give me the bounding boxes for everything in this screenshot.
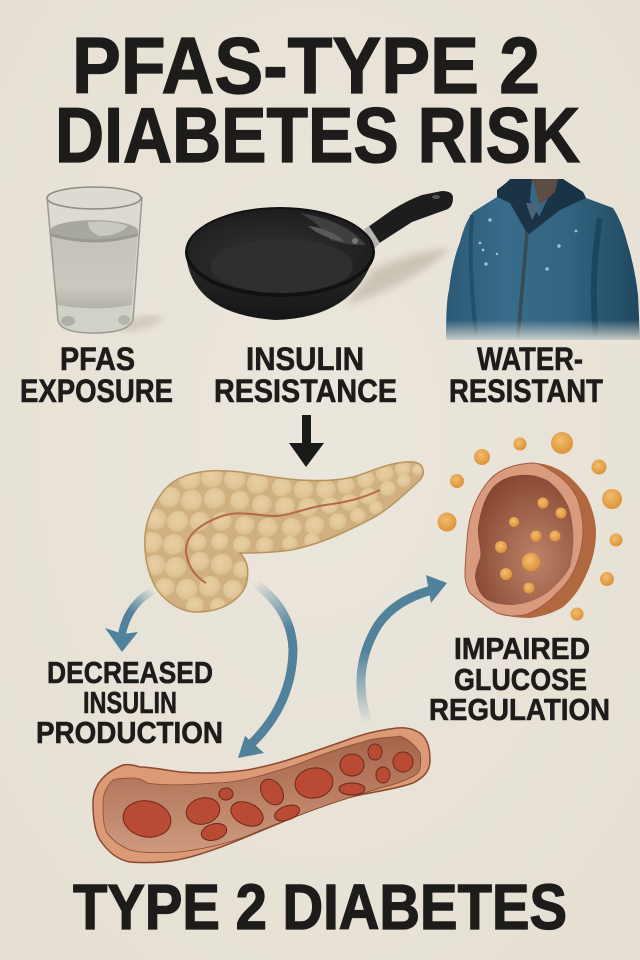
label: PFAS exposure [20,341,173,409]
icon: blood vessel [93,728,430,863]
label: decreased insulin production [36,655,223,750]
arrow: pancreas to decreased insulin [105,590,154,652]
label: impaired glucose regulation [429,631,610,727]
label: decreased insulin production: DECREASED [47,655,213,690]
label: PFAS exposure: PFAS [60,341,135,377]
icon: cell with glucose [438,432,622,620]
icon: pancreas [141,461,424,615]
title: PFAS-TYPE 2 [72,21,540,110]
label: impaired glucose regulation: GLUCOSE [454,662,587,697]
label: decreased insulin production: INSULIN [83,685,177,720]
label: impaired glucose regulation: IMPAIRED [454,631,590,666]
title: DIABETES RISK [55,91,580,179]
label: PFAS exposure: EXPOSURE [20,373,173,409]
label: decreased insulin production: PRODUCTION [36,715,223,750]
label: water-resistant: WATER- [477,341,583,377]
label: insulin resistance [214,341,397,409]
label: insulin resistance: RESISTANCE [214,373,397,409]
red blood cells [120,744,413,843]
label: water-resistant [449,341,603,409]
label: water-resistant: RESISTANT [449,373,603,409]
arrow: down to pancreas [289,415,324,467]
label: impaired glucose regulation: REGULATION [429,692,610,727]
icon: water-resistant jacket [444,179,640,344]
title [55,21,580,179]
water droplets [479,218,577,271]
icon: frying pan [185,191,453,320]
arrow: pancreas to blood vessel [238,583,293,758]
footer title: TYPE 2 DIABETES [73,871,567,943]
glucose particles [438,432,622,620]
label: insulin resistance: INSULIN [246,341,364,377]
arrow: blood vessel to impaired glucose [361,575,447,724]
icon: glass of water [47,187,165,333]
